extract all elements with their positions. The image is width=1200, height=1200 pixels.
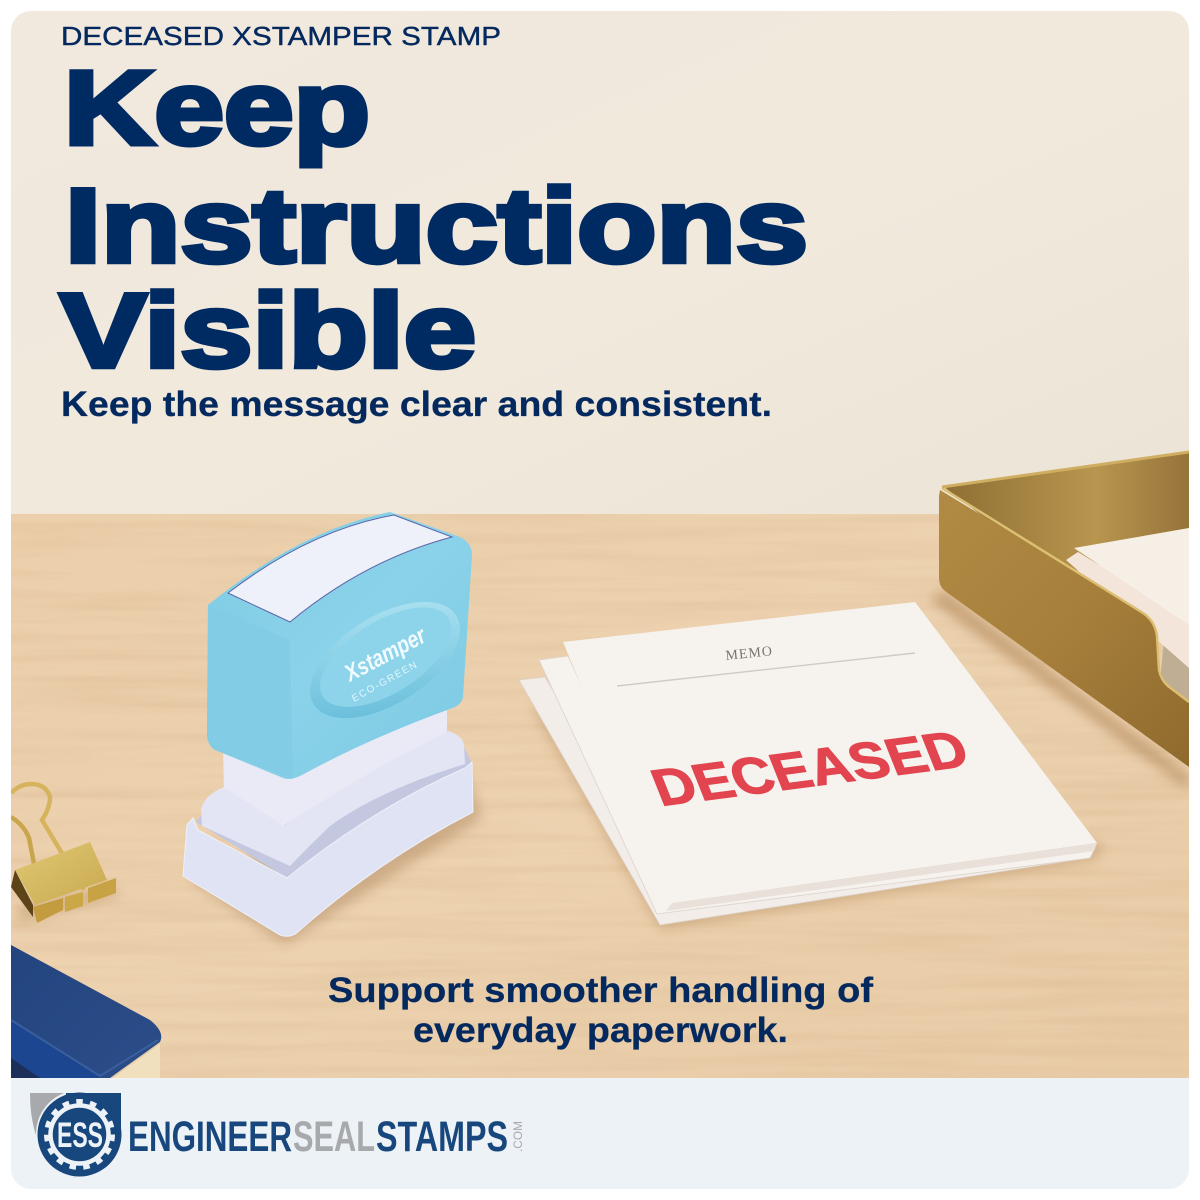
eyebrow title: DECEASED XSTAMPER STAMP <box>61 21 501 51</box>
stamp middle ledge <box>201 731 465 866</box>
xstamper stamp <box>183 512 482 945</box>
bottom caption: everyday paperwork. <box>413 1011 788 1050</box>
memo rule <box>617 653 915 686</box>
logo wordmark <box>128 1113 525 1161</box>
logo wordmark: .COM <box>511 1121 525 1152</box>
wall <box>11 11 1189 515</box>
stamp base floor <box>196 742 472 878</box>
bottom sheet <box>519 677 1088 925</box>
deceased imprint: DECEASED <box>643 721 977 817</box>
bottom caption <box>328 971 873 1050</box>
middle sheet <box>539 656 1094 914</box>
logo wordmark: SEAL <box>293 1113 375 1161</box>
headline: Keep <box>64 50 370 167</box>
binder clip <box>11 784 122 925</box>
stamp cap end face <box>207 605 293 779</box>
xstamper logo text: Xstamper <box>339 622 432 688</box>
letter tray <box>930 452 1189 790</box>
headline <box>60 50 808 390</box>
subheading: Keep the message clear and consistent. <box>61 385 772 424</box>
desk surface <box>11 514 1189 1078</box>
emblem letters: ESS <box>57 1116 103 1155</box>
top sheet <box>563 602 1097 903</box>
memo papers <box>519 602 1105 930</box>
logo: ESS emblem <box>30 1090 124 1178</box>
logo oval <box>310 602 460 718</box>
logo wordmark: STAMPS <box>376 1113 508 1161</box>
footer band <box>11 1078 1189 1189</box>
notebook <box>11 945 161 1078</box>
memo title: MEMO <box>725 644 774 664</box>
logo wordmark: ENGINEER <box>128 1113 292 1161</box>
stamp label window <box>228 515 452 622</box>
headline: Instructions <box>65 168 808 285</box>
stamp cap <box>207 512 472 779</box>
stamp base <box>183 762 473 936</box>
stamp column <box>223 710 447 826</box>
bottom caption: Support smoother handling of <box>328 971 873 1010</box>
headline: Visible <box>60 273 476 390</box>
eco-green text: ECO-GREEN <box>350 659 420 705</box>
